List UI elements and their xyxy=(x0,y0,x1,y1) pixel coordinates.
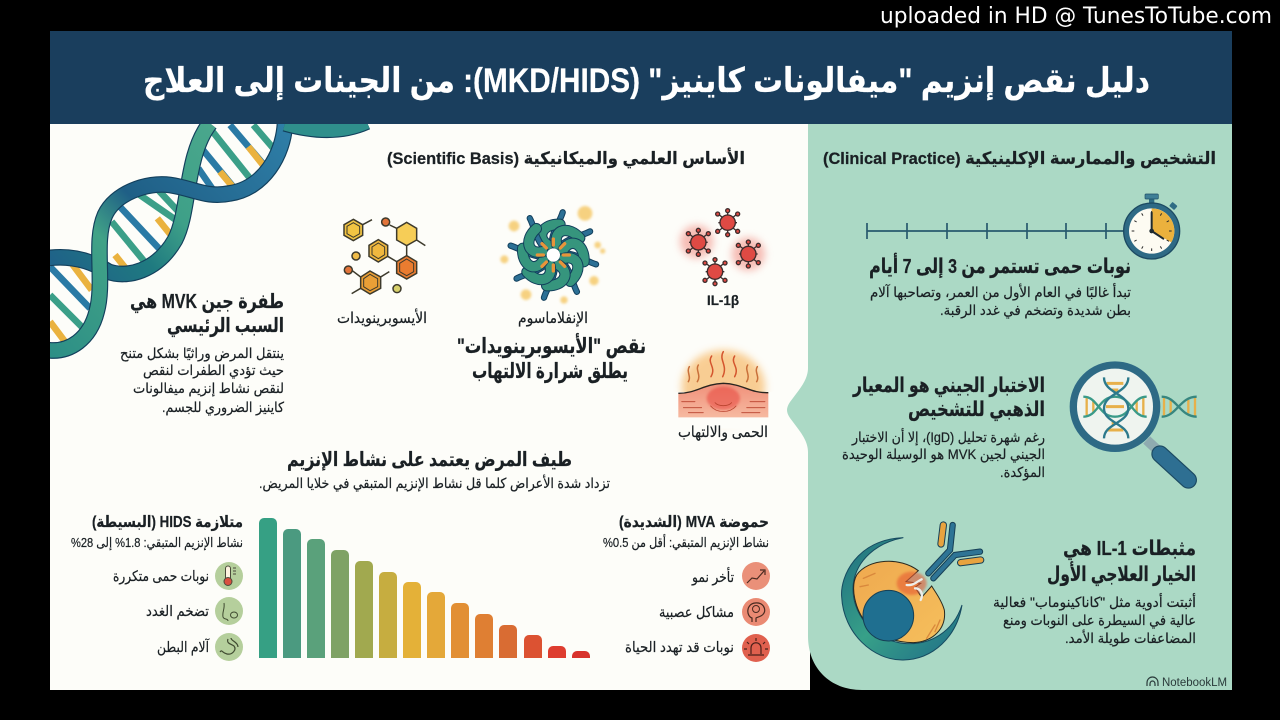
body: genetic testing: رغم شهرة تحليل (IgD)، إلا أن الاختبار xyxy=(851,428,1045,446)
icon: fever and inflammation xyxy=(670,350,777,429)
heading: isoprenoid deficiency: يطلق شرارة الالتهاب xyxy=(472,360,628,383)
text: HIDS residual activity: نشاط الإنزيم المتبقي: 1.8% إلى 28% xyxy=(71,535,243,551)
cell crescent xyxy=(842,538,962,660)
heading: fever episodes: نوبات حمى تستمر من 3 إلى 7 أيام xyxy=(869,252,1131,278)
body: IL-1 inhibitors: المضاعفات طويلة الأمد. xyxy=(1065,629,1196,647)
icon: magnifier over DNA xyxy=(1073,365,1197,480)
symptom: abdominal pain: آلام البطن xyxy=(157,638,210,656)
panel: HIDS column xyxy=(71,514,243,661)
icon: IL-1 beta particles xyxy=(680,209,765,286)
text block: MVK mutation xyxy=(120,291,284,416)
label: IL-1 beta: IL-1β xyxy=(707,292,739,308)
label: inflammasome: الإنفلاماسوم xyxy=(518,310,588,327)
body: fever episodes: تبدأ غالبًا في العام الأول من العمر، وتصاحبها آلام xyxy=(870,283,1131,301)
symptom: neurological problems: مشاكل عصبية xyxy=(659,605,734,621)
bar chart: enzyme activity spectrum xyxy=(259,518,590,658)
rungs xyxy=(50,125,273,342)
icon: timeline xyxy=(867,223,1125,239)
panel: MVA column xyxy=(603,514,770,662)
heading: genetic testing xyxy=(852,374,1045,421)
text block: genetic testing xyxy=(842,374,1045,481)
body: fever episodes: بطن شديدة وتضخم في غدد الرقبة. xyxy=(940,302,1131,319)
heading: scientific basis: الأساس العلمي والميكانيكية (Scientific Basis) xyxy=(387,148,745,169)
icon: stopwatch xyxy=(1124,194,1180,259)
panel: left science area xyxy=(50,124,810,690)
body: genetic testing: الجيني لجين MVK هو الوسيلة الوحيدة xyxy=(842,446,1045,463)
symptom: recurrent fever xyxy=(113,562,243,590)
cell body xyxy=(854,561,945,643)
heading: IL-1 inhibitors: الخيار العلاجي الأول xyxy=(1047,560,1196,586)
symptom: neurological problems xyxy=(659,598,770,626)
icon: antibody blocking cell xyxy=(842,525,981,660)
heading: IL-1 inhibitors: مثبطات IL-1 هي xyxy=(1063,537,1196,560)
body: MVK mutation xyxy=(120,345,284,416)
body: IL-1 inhibitors: أثبتت أدوية مثل "كاناكينوماب" فعالية xyxy=(993,593,1196,611)
icon: inflammasome xyxy=(500,206,605,304)
heading: IL-1 inhibitors xyxy=(1047,537,1196,586)
heading: isoprenoid deficiency xyxy=(457,332,646,383)
text: MVA residual activity: نشاط الإنزيم المتبقي: أقل من 0.5% xyxy=(603,534,769,551)
heading: MVK mutation xyxy=(130,291,284,338)
text block: fever episodes xyxy=(869,252,1131,319)
heading: MVA: حموضة MVA (الشديدة) xyxy=(619,514,769,531)
icon: DNA helix xyxy=(47,122,367,350)
heading: MVK mutation: السبب الرئيسي xyxy=(167,315,284,338)
antibody xyxy=(928,525,981,578)
heading: clinical practice: التشخيص والممارسة الإكلينيكية (Clinical Practice) xyxy=(823,149,1216,169)
body: IL-1 inhibitors: عالية في السيطرة على النوبات ومنع xyxy=(1003,612,1196,629)
text block: IL-1 inhibitors xyxy=(993,537,1196,647)
symptom: growth delay: تأخر نمو xyxy=(691,567,734,586)
symptom: life-threatening attacks xyxy=(625,634,770,662)
logo: NotebookLM: NotebookLM xyxy=(1162,677,1227,689)
icon: isoprenoid molecules xyxy=(344,218,425,294)
body: IL-1 inhibitors xyxy=(993,593,1196,647)
heading: genetic testing: الذهبي للتشخيص xyxy=(908,398,1045,421)
body: MVK mutation: كاينيز الضروري للجسم. xyxy=(162,399,284,416)
body: genetic testing xyxy=(842,428,1045,481)
symptom: growth delay xyxy=(691,562,770,590)
title: دليل نقص إنزيم "ميفالونات كاينيز" (MKD/HIDS): من الجينات إلى العلاج xyxy=(143,62,1150,101)
body: MVK mutation: ينتقل المرض وراثيًا بشكل متنح xyxy=(120,345,284,362)
symptom: swollen glands xyxy=(146,597,243,625)
body: genetic testing: المؤكدة. xyxy=(1000,464,1045,481)
symptom: recurrent fever: نوبات حمى متكررة xyxy=(113,569,209,585)
heading: isoprenoid deficiency: نقص "الأيسوبرينويدات" xyxy=(457,332,646,358)
heading: HIDS: متلازمة HIDS (البسيطة) xyxy=(92,514,243,531)
body: fever episodes xyxy=(870,283,1131,319)
body: MVK mutation: لنقص نشاط إنزيم ميفالونات xyxy=(133,380,284,397)
heading: genetic testing: الاختبار الجيني هو المعيار xyxy=(852,374,1045,397)
label: isoprenoids: الأيسوبرينويدات xyxy=(337,308,427,327)
title bar xyxy=(50,31,1232,124)
body: MVK mutation: حيث تؤدي الطفرات لنقص xyxy=(143,362,284,379)
panel: clinical practice xyxy=(787,124,1232,690)
heading: disease spectrum: طيف المرض يعتمد على نشاط الإنزيم xyxy=(287,449,572,471)
symptom: life-threatening attacks: نوبات قد تهدد الحياة xyxy=(625,640,734,656)
strands xyxy=(47,123,210,274)
symptom: abdominal pain xyxy=(157,633,243,661)
symptom: swollen glands: تضخم الغدد xyxy=(146,604,209,620)
upload watermark: uploaded in HD @ TunesToTube.com xyxy=(880,3,1272,29)
heading: MVK mutation: طفرة جين MVK هي xyxy=(130,291,284,314)
subheading: disease spectrum: تزداد شدة الأعراض كلما قل نشاط الإنزيم المتبقي في خلايا المريض. xyxy=(259,474,610,492)
label: fever and inflammation: الحمى والالتهاب xyxy=(678,424,768,441)
